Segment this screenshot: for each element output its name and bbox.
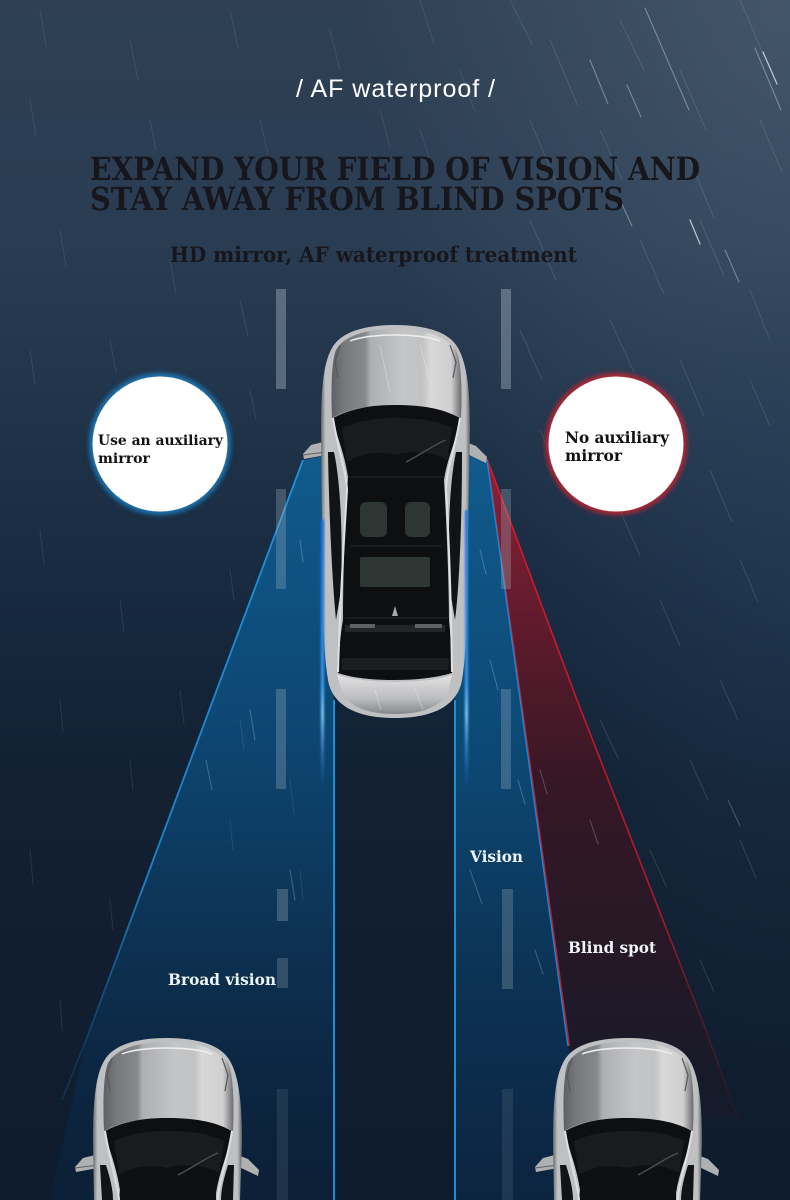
title bbox=[90, 150, 700, 218]
callout: no auxiliary mirror: mirror bbox=[565, 446, 623, 465]
title: STAY AWAY FROM BLIND SPOTS bbox=[90, 180, 624, 218]
car: bottom right following car bbox=[535, 1038, 719, 1200]
callout: no auxiliary mirror bbox=[545, 373, 687, 515]
label: broad vision: Broad vision bbox=[168, 970, 276, 989]
callout: use an auxiliary mirror: mirror bbox=[98, 451, 151, 467]
car: main silver sedan from above bbox=[303, 325, 487, 718]
car side blue lines bbox=[321, 510, 468, 790]
callout: use an auxiliary mirror: Use an auxiliary bbox=[98, 433, 224, 449]
label: vision: Vision bbox=[469, 847, 523, 866]
subtitle: HD mirror, AF waterproof treatment bbox=[170, 242, 577, 267]
beam: blue left broad vision bbox=[50, 456, 334, 1200]
beam: blue right vision bbox=[455, 456, 590, 1200]
label: blind spot: Blind spot bbox=[568, 938, 657, 957]
callout: no auxiliary mirror: No auxiliary bbox=[565, 428, 670, 447]
vision edge lines bbox=[333, 700, 456, 1200]
beam: red blind spot bbox=[487, 459, 740, 1120]
title: EXPAND YOUR FIELD OF VISION AND bbox=[90, 150, 700, 188]
callout: use an auxiliary mirror bbox=[89, 373, 231, 515]
heading tag: / AF waterproof / bbox=[296, 75, 495, 103]
lane markings bbox=[276, 289, 513, 1200]
car: bottom left following car bbox=[75, 1038, 259, 1200]
